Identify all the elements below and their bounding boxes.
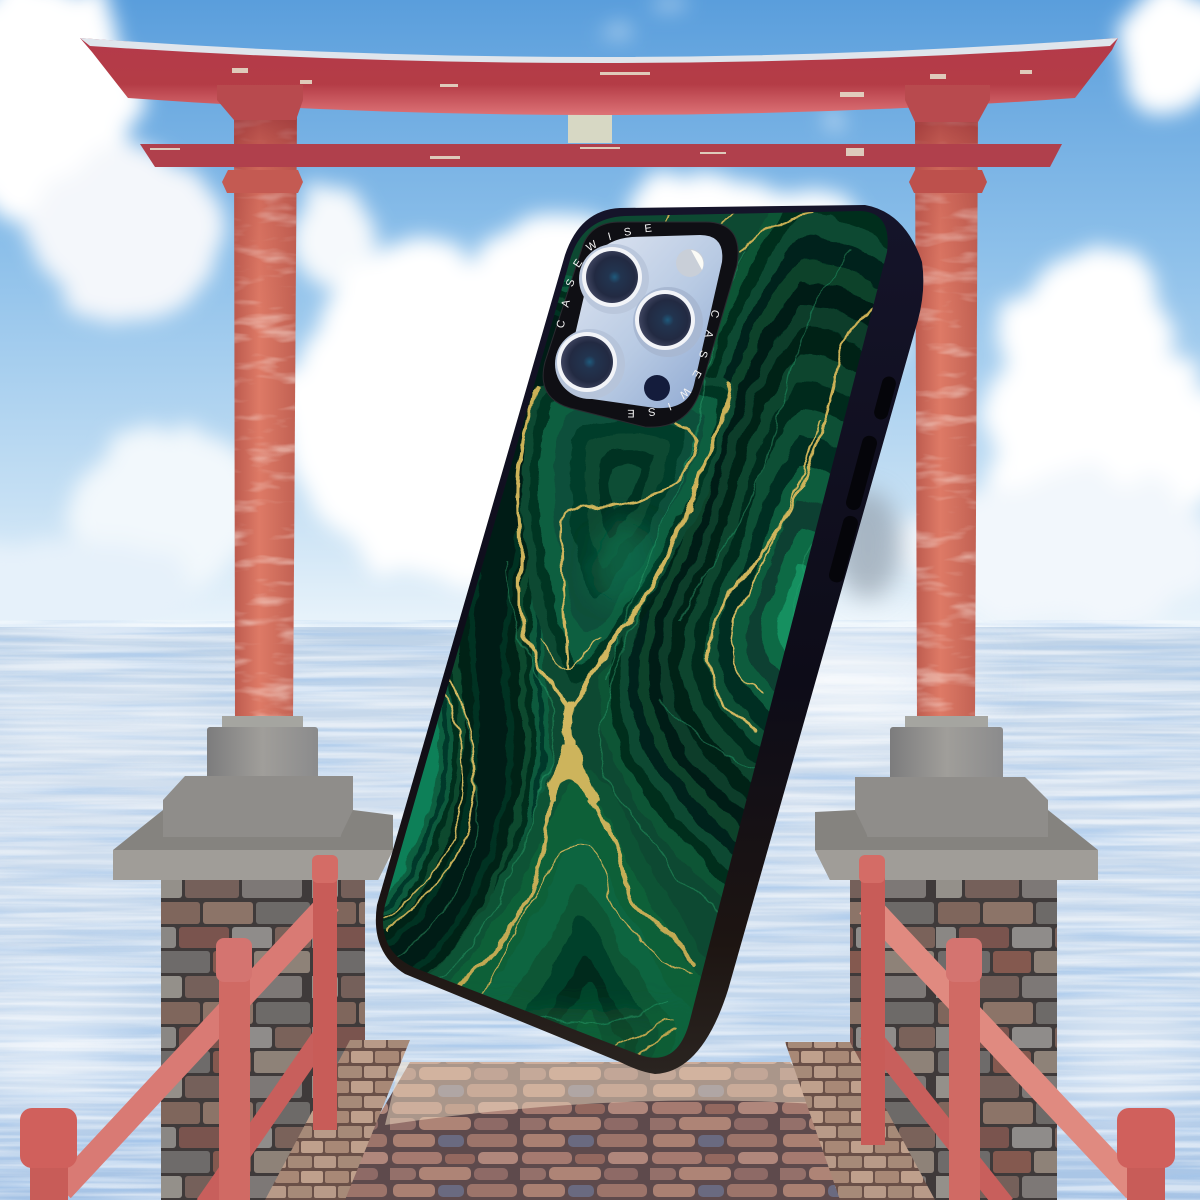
gold waist knot	[547, 745, 600, 806]
teal center patch	[583, 513, 661, 607]
paint flecks	[150, 68, 1032, 159]
grey cloud behind phone	[836, 490, 900, 600]
center tablet	[568, 110, 612, 143]
right stone base	[815, 716, 1098, 880]
column rings left	[222, 170, 303, 193]
stone bridge floor	[265, 1040, 935, 1200]
upper center bands	[523, 367, 735, 700]
right concentric bands	[598, 211, 888, 897]
titanium plate	[567, 235, 722, 408]
torii gate	[80, 38, 1118, 725]
gold veins	[385, 212, 876, 1054]
lidar sensor	[644, 375, 670, 401]
right column	[915, 122, 978, 716]
side buttons	[827, 375, 897, 584]
left railing	[20, 855, 338, 1200]
right railing	[859, 855, 1175, 1200]
top beam	[80, 38, 1118, 115]
brand text upper ring: CASEWISE	[556, 224, 652, 328]
lens bottom	[555, 329, 625, 399]
left bands	[385, 330, 555, 960]
column caps left	[217, 85, 303, 120]
camera ring	[543, 222, 738, 427]
right brick pillar	[850, 880, 1057, 1200]
lower mountain bands	[430, 769, 706, 1054]
column caps right	[905, 85, 990, 122]
brand text lower ring: CASEWISE	[628, 310, 719, 418]
lens top	[579, 244, 649, 314]
malachite back face	[383, 211, 888, 1058]
left column	[234, 117, 297, 716]
sea	[0, 627, 1200, 1200]
flash	[676, 249, 704, 277]
teal left glow	[388, 720, 440, 894]
camera island	[542, 222, 738, 428]
left brick pillar	[161, 880, 365, 1200]
phone in malachite case	[376, 205, 924, 1074]
sky	[0, 0, 1200, 630]
lens right	[633, 287, 703, 357]
left stone base	[113, 716, 393, 880]
pale green band lines	[395, 250, 880, 1024]
case body	[376, 205, 923, 1074]
lower beam	[140, 144, 1062, 167]
clouds	[0, 0, 1200, 630]
column rings right	[909, 170, 987, 193]
